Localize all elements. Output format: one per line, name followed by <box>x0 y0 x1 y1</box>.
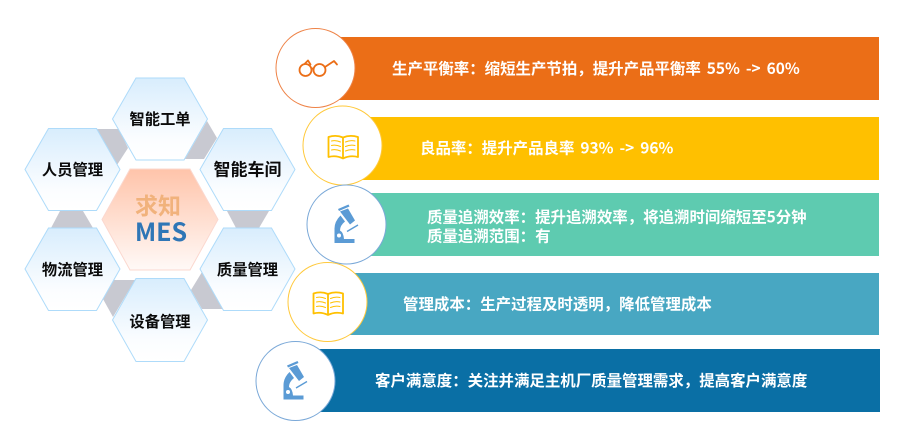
hexagon: 智能车间 <box>200 128 295 210</box>
hexagon: 物流管理 <box>25 228 120 310</box>
hexagon: 设备管理: 设备管理 <box>129 310 191 332</box>
bar: 质量追溯 <box>360 193 879 256</box>
bar: 管理成本: 管理成本：生产过程及时透明，降低管理成本 <box>403 292 712 314</box>
circle icon: microscope <box>307 185 386 264</box>
hexagon: 设备管理 <box>112 278 208 362</box>
bar: 生产平衡率 <box>330 37 879 100</box>
hexagon: 物流管理: 物流管理 <box>42 258 103 280</box>
bar: 客户满意度 <box>310 349 880 412</box>
center hexagon: 求知 MES <box>102 169 218 270</box>
hexagon: 质量管理 <box>200 228 295 310</box>
bar: 质量追溯: 质量追溯效率：提升追溯效率，将追溯时间缩短至5分钟 <box>427 206 807 228</box>
circle icon: glasses <box>276 28 355 108</box>
circle icon: microscope <box>256 342 335 420</box>
bar: 良品率: 良品率：提升产品良率 93% -> 96% <box>420 136 674 158</box>
bar: 质量追溯: 质量追溯范围：有 <box>427 224 551 246</box>
hexagon: 智能工单: 智能工单 <box>129 108 191 130</box>
hexagon: 人员管理: 人员管理 <box>42 158 103 180</box>
circle icon: book <box>288 262 367 342</box>
grey connectors <box>51 121 269 317</box>
hexagon diagram <box>25 78 295 362</box>
circle icon: book <box>303 106 382 185</box>
hexagon: 智能工单 <box>112 78 208 160</box>
bar: 客户满意度: 客户满意度：关注并满足主机厂质量管理需求，提高客户满意度 <box>375 369 807 391</box>
hexagon: 质量管理: 质量管理 <box>217 258 278 280</box>
center hexagon: 求知 MES: MES <box>135 213 187 249</box>
bar: 管理成本 <box>340 273 879 335</box>
center hexagon: 求知 MES: 求知 <box>135 187 181 221</box>
bar: 良品率 <box>360 117 879 180</box>
bar: 生产平衡率: 生产平衡率：缩短生产节拍，提升产品平衡率 55% -> 60% <box>392 57 800 79</box>
hexagon: 人员管理 <box>25 128 120 210</box>
hexagon: 智能车间: 智能车间 <box>214 156 282 180</box>
